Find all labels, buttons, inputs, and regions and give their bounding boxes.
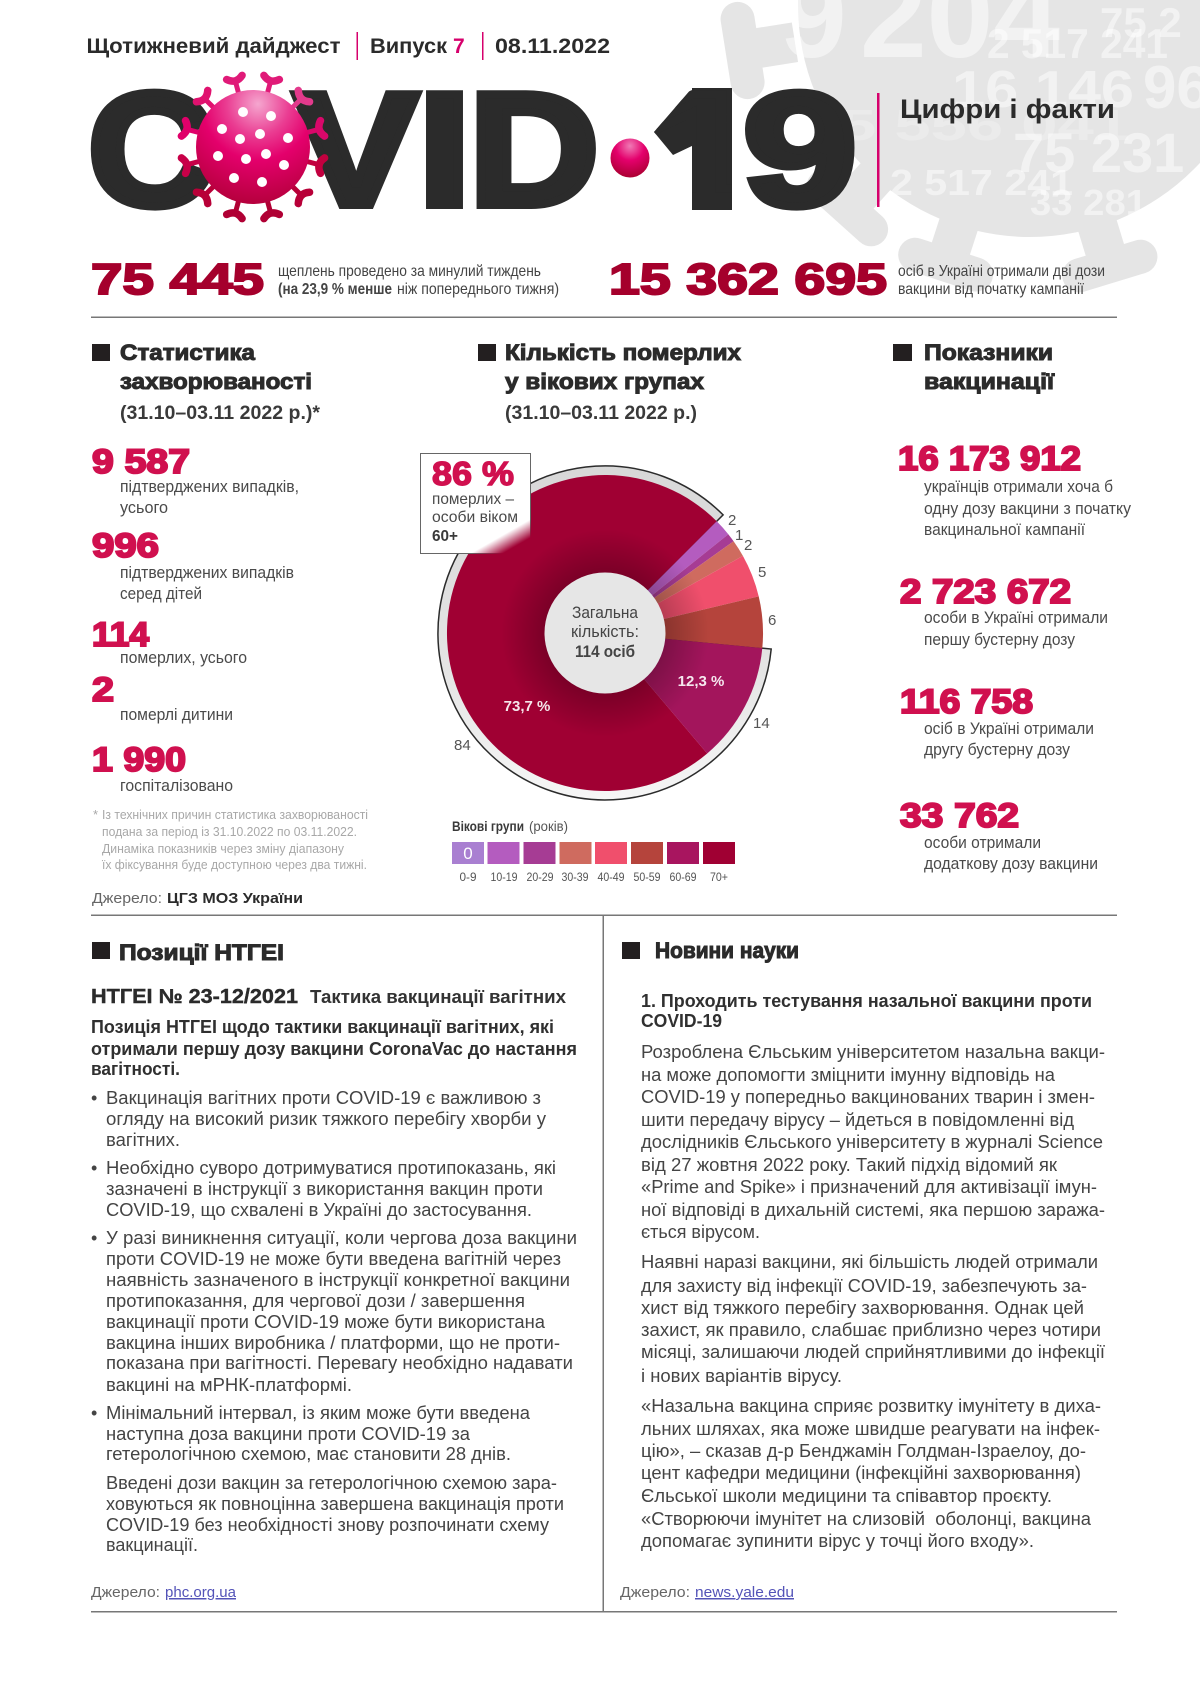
panel: morbidity statistics: 996: [92, 527, 159, 565]
panel: vaccination indicators: першу бустерну дозу: [924, 631, 1076, 649]
paragraph 2: хист від тяжкого перебігу захворювання. Однак цей: [641, 1298, 1084, 1318]
heading: morbidity statistics: захворюваності: [120, 369, 312, 394]
panel: vaccination indicators: українців отримали хоча б: [924, 478, 1113, 496]
closing paragraph: COVID-19 без необхідності знову розпочинати схему: [106, 1515, 549, 1535]
panel: morbidity statistics: серед дітей: [120, 585, 202, 603]
bullet list: COVID-19, що схвалені в Україні до застосування.: [106, 1200, 532, 1220]
paragraph 1: [641, 1042, 1105, 1242]
panel: morbidity statistics: 114: [92, 616, 149, 654]
panel: morbidity statistics: усього: [120, 499, 168, 517]
footnote: *: [93, 807, 98, 822]
pie chart: Загальна: [572, 603, 638, 622]
pie chart: [438, 466, 776, 800]
paragraph 3: цент кафедри медицини (інфекційні захворювання): [641, 1463, 1081, 1483]
background virus with numbers: 16 146: [952, 61, 1134, 119]
legend: age groups: 0: [463, 844, 473, 863]
legend: age groups: 20-29: [526, 870, 554, 884]
lead paragraph: [91, 1017, 577, 1079]
paragraph 1: на може допомогти зміцнити імунну відповідь на: [641, 1065, 1056, 1085]
callout: 86 percent: особи віком: [432, 509, 518, 526]
digest header line: Випуск: [370, 35, 448, 58]
panel: vaccination indicators: 16 173 912: [898, 440, 1081, 478]
panel: vaccination indicators: [893, 340, 1132, 873]
paragraph 2: і нових варіантів вірусу.: [641, 1366, 842, 1386]
paragraph 2: захист, як правило, слабшає приблизно через чотири: [641, 1320, 1101, 1340]
panel: vaccination indicators: одну дозу вакцини з початку: [924, 500, 1132, 518]
heading: vaccination indicators: [924, 340, 1055, 394]
paragraph 3: [641, 1396, 1101, 1551]
key figure: two doses: [609, 255, 1105, 304]
title COVID-19: V: [294, 60, 418, 240]
bullet list: У разі виникнення ситуації, коли чергова доза вакцини: [106, 1228, 577, 1248]
background virus with numbers: [738, 0, 1200, 275]
bullet list: •: [91, 1403, 97, 1423]
paragraph 2: місяці, залишаючи людей сприйнятливими до інфекції: [641, 1342, 1105, 1362]
footnote: їх фіксування буде доступною через два тижні.: [101, 857, 367, 872]
legend: age groups: 60-69: [670, 870, 697, 884]
heading: morbidity statistics: Статистика: [120, 340, 256, 365]
article title: COVID-19: [641, 1011, 722, 1031]
heading: deaths by age: [505, 340, 742, 424]
footnote: Динаміка показників через зміну діапазону: [102, 841, 344, 856]
bullet list: протипоказання, для чергової дози / завершення: [106, 1291, 525, 1311]
source: [620, 1584, 794, 1601]
source: phc.org.ua: [165, 1584, 237, 1601]
bullet list: вакцина інших виробника / платформи, що не проти-: [106, 1333, 560, 1353]
callout: 86 percent: 86 %: [432, 455, 514, 492]
key figure: weekly vaccinations: [91, 255, 559, 304]
icon: virus in logo: [181, 75, 325, 219]
document title: НТГЕІ № 23-12/2021: [91, 986, 298, 1008]
panel: vaccination indicators: особи отримали: [924, 834, 1041, 852]
key figure: two doses: осіб в Україні отримали дві дози: [898, 263, 1105, 280]
bullet list: наявність зазначеного в інструкції конкретної вакцини: [106, 1270, 570, 1290]
pie chart: 1: [735, 527, 743, 544]
paragraph 1: ної відповіді в дихальній системі, яка першою заража-: [641, 1200, 1105, 1220]
panel: morbidity statistics: 1 990: [92, 741, 186, 779]
heading: deaths by age: (31.10–03.11 2022 р.): [505, 403, 697, 424]
pie chart: 2: [728, 512, 736, 529]
icon: pink dot: [610, 138, 650, 178]
key figure: weekly vaccinations: ніж попереднього тижня): [397, 281, 559, 298]
document title: [91, 986, 566, 1008]
legend: age groups: 40-49: [598, 870, 625, 884]
callout: 86 percent: [420, 453, 531, 554]
bullet list: [91, 1088, 577, 1464]
legend: age groups: Вікові групи: [452, 818, 524, 834]
paragraph 1: ється вірусом.: [641, 1222, 760, 1242]
bullet list: наступна доза вакцини проти COVID-19 за: [106, 1424, 471, 1444]
legend: age groups: 0-9: [460, 870, 477, 884]
bullet list: вакцинації проти COVID-19 може бути використана: [106, 1312, 546, 1332]
lead paragraph: отримали першу дозу вакцини CoronaVac до настання: [91, 1039, 577, 1059]
source: Джерело:: [92, 890, 162, 907]
callout: 86 percent: померлих –: [432, 491, 514, 508]
background virus with numbers: 2 517 241: [987, 20, 1168, 67]
legend: age groups: [452, 818, 735, 884]
closing paragraph: вакцинації.: [106, 1535, 198, 1555]
pie chart: 5: [758, 564, 766, 581]
paragraph 3: допомагає зупинити вірус у точці його входу».: [641, 1531, 1034, 1551]
bullet list: Вакцинація вагітних проти COVID-19 є важливою з: [106, 1088, 541, 1108]
key figure: weekly vaccinations: 75 445: [91, 255, 264, 304]
heading: morbidity statistics: [120, 340, 321, 424]
paragraph 1: дослідників Єльського університету в журналі Science: [641, 1132, 1103, 1152]
pie chart: 114 осіб: [575, 642, 635, 661]
digest header line: [86, 32, 610, 60]
heading: morbidity statistics: (31.10–03.11 2022 р.)*: [120, 403, 321, 424]
paragraph 2: Наявні наразі вакцини, які більшість людей отримали: [641, 1252, 1098, 1272]
closing paragraph: ховуються як повноцінна завершена вакцинація проти: [106, 1494, 564, 1514]
panel: morbidity statistics: підтверджених випадків: [120, 564, 294, 582]
pie chart: 12,3 %: [678, 673, 724, 690]
bullet list: гетерологічною схемою, має становити 28 днів.: [106, 1444, 511, 1464]
title COVID-19: 9: [743, 60, 857, 240]
lead paragraph: Позиція НТГЕІ щодо тактики вакцинації вагітних, які: [91, 1017, 554, 1037]
paragraph 3: «Створюючи імунітет на слизовій оболонці, вакцина: [641, 1509, 1092, 1529]
bullet list: •: [91, 1158, 97, 1178]
bullet list: зазначені в інструкції з використання вакцин проти: [106, 1179, 543, 1199]
paragraph 1: Розроблена Єльським університетом назальна вакци-: [641, 1042, 1105, 1062]
key figure: two doses: 15 362 695: [609, 255, 887, 304]
legend: age groups: 10-19: [490, 870, 518, 884]
bullet list: огляду на високий ризик тяжкого перебігу хворби у: [106, 1109, 546, 1129]
panel: morbidity statistics: 9 587: [92, 443, 190, 481]
pie chart: 73,7 %: [504, 698, 550, 715]
paragraph 3: льних шляхах, яка може швидше реагувати на інфек-: [641, 1419, 1100, 1439]
bullet list: Необхідно суворо дотримуватися протипоказань, які: [106, 1158, 556, 1178]
key figure: two doses: вакцини від початку кампанії: [898, 281, 1084, 298]
paragraph 1: «Prime and Spike» і призначений для активізації імун-: [641, 1177, 1097, 1197]
heading: science news: Новини науки: [655, 938, 799, 963]
source: news.yale.edu: [695, 1584, 794, 1601]
title COVID-19: I: [418, 60, 471, 240]
bullet list: вакцині на мРНК-платформі.: [106, 1375, 352, 1395]
key figure: weekly vaccinations: щеплень проведено за минулий тиждень: [278, 263, 541, 280]
paragraph 1: шити передачу вірусу – йдеться в повідомленні від: [641, 1110, 1074, 1130]
bullet list: проти COVID-19 не може бути введена вагітній через: [106, 1249, 561, 1269]
footnote: [93, 807, 368, 872]
paragraph 2: для захисту від інфекції COVID-19, забезпечують за-: [641, 1276, 1087, 1296]
digest header line: 08.11.2022: [495, 35, 610, 58]
background virus with numbers: 75 231: [1013, 121, 1184, 184]
heading: vaccination indicators: Показники: [924, 340, 1053, 365]
heading: vaccination indicators: вакцинації: [924, 369, 1055, 394]
source: Джерело:: [91, 1584, 160, 1601]
heading: deaths by age: Кількість померлих: [505, 340, 742, 365]
bullet list: Мінімальний інтервал, із яким може бути введена: [106, 1403, 531, 1423]
closing paragraph: [106, 1473, 564, 1555]
title COVID-19: 1: [641, 60, 761, 240]
panel: morbidity statistics: 2: [92, 671, 114, 709]
callout: 86 percent: 60+: [432, 528, 458, 545]
panel: deaths by age: [420, 340, 776, 884]
bullet list: показана при вагітності. Перевагу необхідно надавати: [106, 1353, 573, 1373]
digest header line: 7: [453, 35, 465, 58]
panel: vaccination indicators: 2 723 672: [900, 573, 1071, 611]
legend: age groups: 30-39: [562, 870, 589, 884]
panel: morbidity statistics: [92, 340, 368, 907]
heading: deaths by age: у вікових групах: [505, 369, 705, 394]
pie chart: 14: [753, 715, 770, 732]
source: [91, 1584, 237, 1601]
panel: morbidity statistics: померлих, усього: [120, 649, 247, 667]
panel: vaccination indicators: другу бустерну дозу: [924, 741, 1071, 759]
source: [92, 890, 303, 907]
paragraph 1: від 27 жовтня 2022 року. Такий підхід відомий як: [641, 1155, 1057, 1175]
paragraph 2: [641, 1252, 1105, 1386]
paragraph 3: Єльської школи медицини та співавтор проєкту.: [641, 1486, 1052, 1506]
background virus with numbers: 75 2: [1100, 0, 1182, 46]
digest header line: Щотижневий дайджест: [86, 35, 340, 58]
panel: vaccination indicators: 116 758: [900, 683, 1033, 721]
source: Джерело:: [620, 1584, 690, 1601]
document title: Тактика вакцинації вагітних: [310, 987, 566, 1007]
footnote: Із технічних причин статистика захворюваності: [102, 807, 368, 822]
article title: [641, 991, 1092, 1031]
bullet list: •: [91, 1088, 97, 1108]
paragraph 3: «Назальна вакцина сприяє розвитку імунітету в диха-: [641, 1396, 1101, 1416]
panel: vaccination indicators: осіб в Україні отримали: [924, 720, 1094, 738]
legend: age groups: (років): [529, 818, 568, 834]
panel: morbidity statistics: померлі дитини: [120, 706, 233, 724]
bullet list: •: [91, 1228, 97, 1248]
footnote: подана за період із 31.10.2022 по 03.11.2022.: [102, 824, 357, 839]
background virus with numbers: 2 517 241: [890, 162, 1073, 203]
article title: 1. Проходить тестування назальної вакцини проти: [641, 991, 1092, 1011]
pie chart: 84: [454, 737, 471, 754]
panel: science news: [620, 938, 1105, 1601]
panel: NITAG positions: [91, 940, 577, 1601]
panel: vaccination indicators: особи в Україні отримали: [924, 609, 1108, 627]
bullet list: вагітних.: [106, 1130, 180, 1150]
panel: vaccination indicators: додаткову дозу вакцини: [924, 855, 1098, 873]
pie chart: кількість:: [571, 622, 639, 641]
panel: morbidity statistics: госпіталізовано: [120, 777, 233, 795]
pie chart: 6: [768, 612, 776, 629]
subtitle: figures and facts: Цифри і факти: [900, 94, 1115, 124]
title COVID-19: [90, 88, 854, 211]
key figure: weekly vaccinations: (на 23,9 % менше: [278, 281, 392, 298]
source: ЦГЗ МОЗ України: [167, 890, 303, 907]
legend: age groups: 50-59: [634, 870, 661, 884]
background virus with numbers: 33 281: [1030, 182, 1147, 223]
closing paragraph: Введені дози вакцин за гетерологічною схемою зара-: [106, 1473, 557, 1493]
pie chart: 2: [744, 537, 752, 554]
paragraph 1: COVID-19 у попередньо вакцинованих тварин і змен-: [641, 1087, 1095, 1107]
title COVID-19: C: [88, 60, 213, 240]
paragraph 3: цію», – сказав д-р Бенджамін Голдман-Ізраелоу, до-: [641, 1441, 1086, 1461]
legend: age groups: 70+: [710, 870, 728, 884]
lead paragraph: вагітності.: [91, 1059, 180, 1079]
panel: morbidity statistics: підтверджених випадків,: [120, 478, 299, 496]
title COVID-19: D: [469, 60, 599, 240]
panel: vaccination indicators: 33 762: [900, 797, 1019, 835]
heading: NITAG positions: Позиції НТГЕІ: [119, 940, 284, 965]
panel: vaccination indicators: вакцинальної кампанії: [924, 521, 1085, 539]
background virus with numbers: 5 556 041: [840, 101, 1130, 150]
